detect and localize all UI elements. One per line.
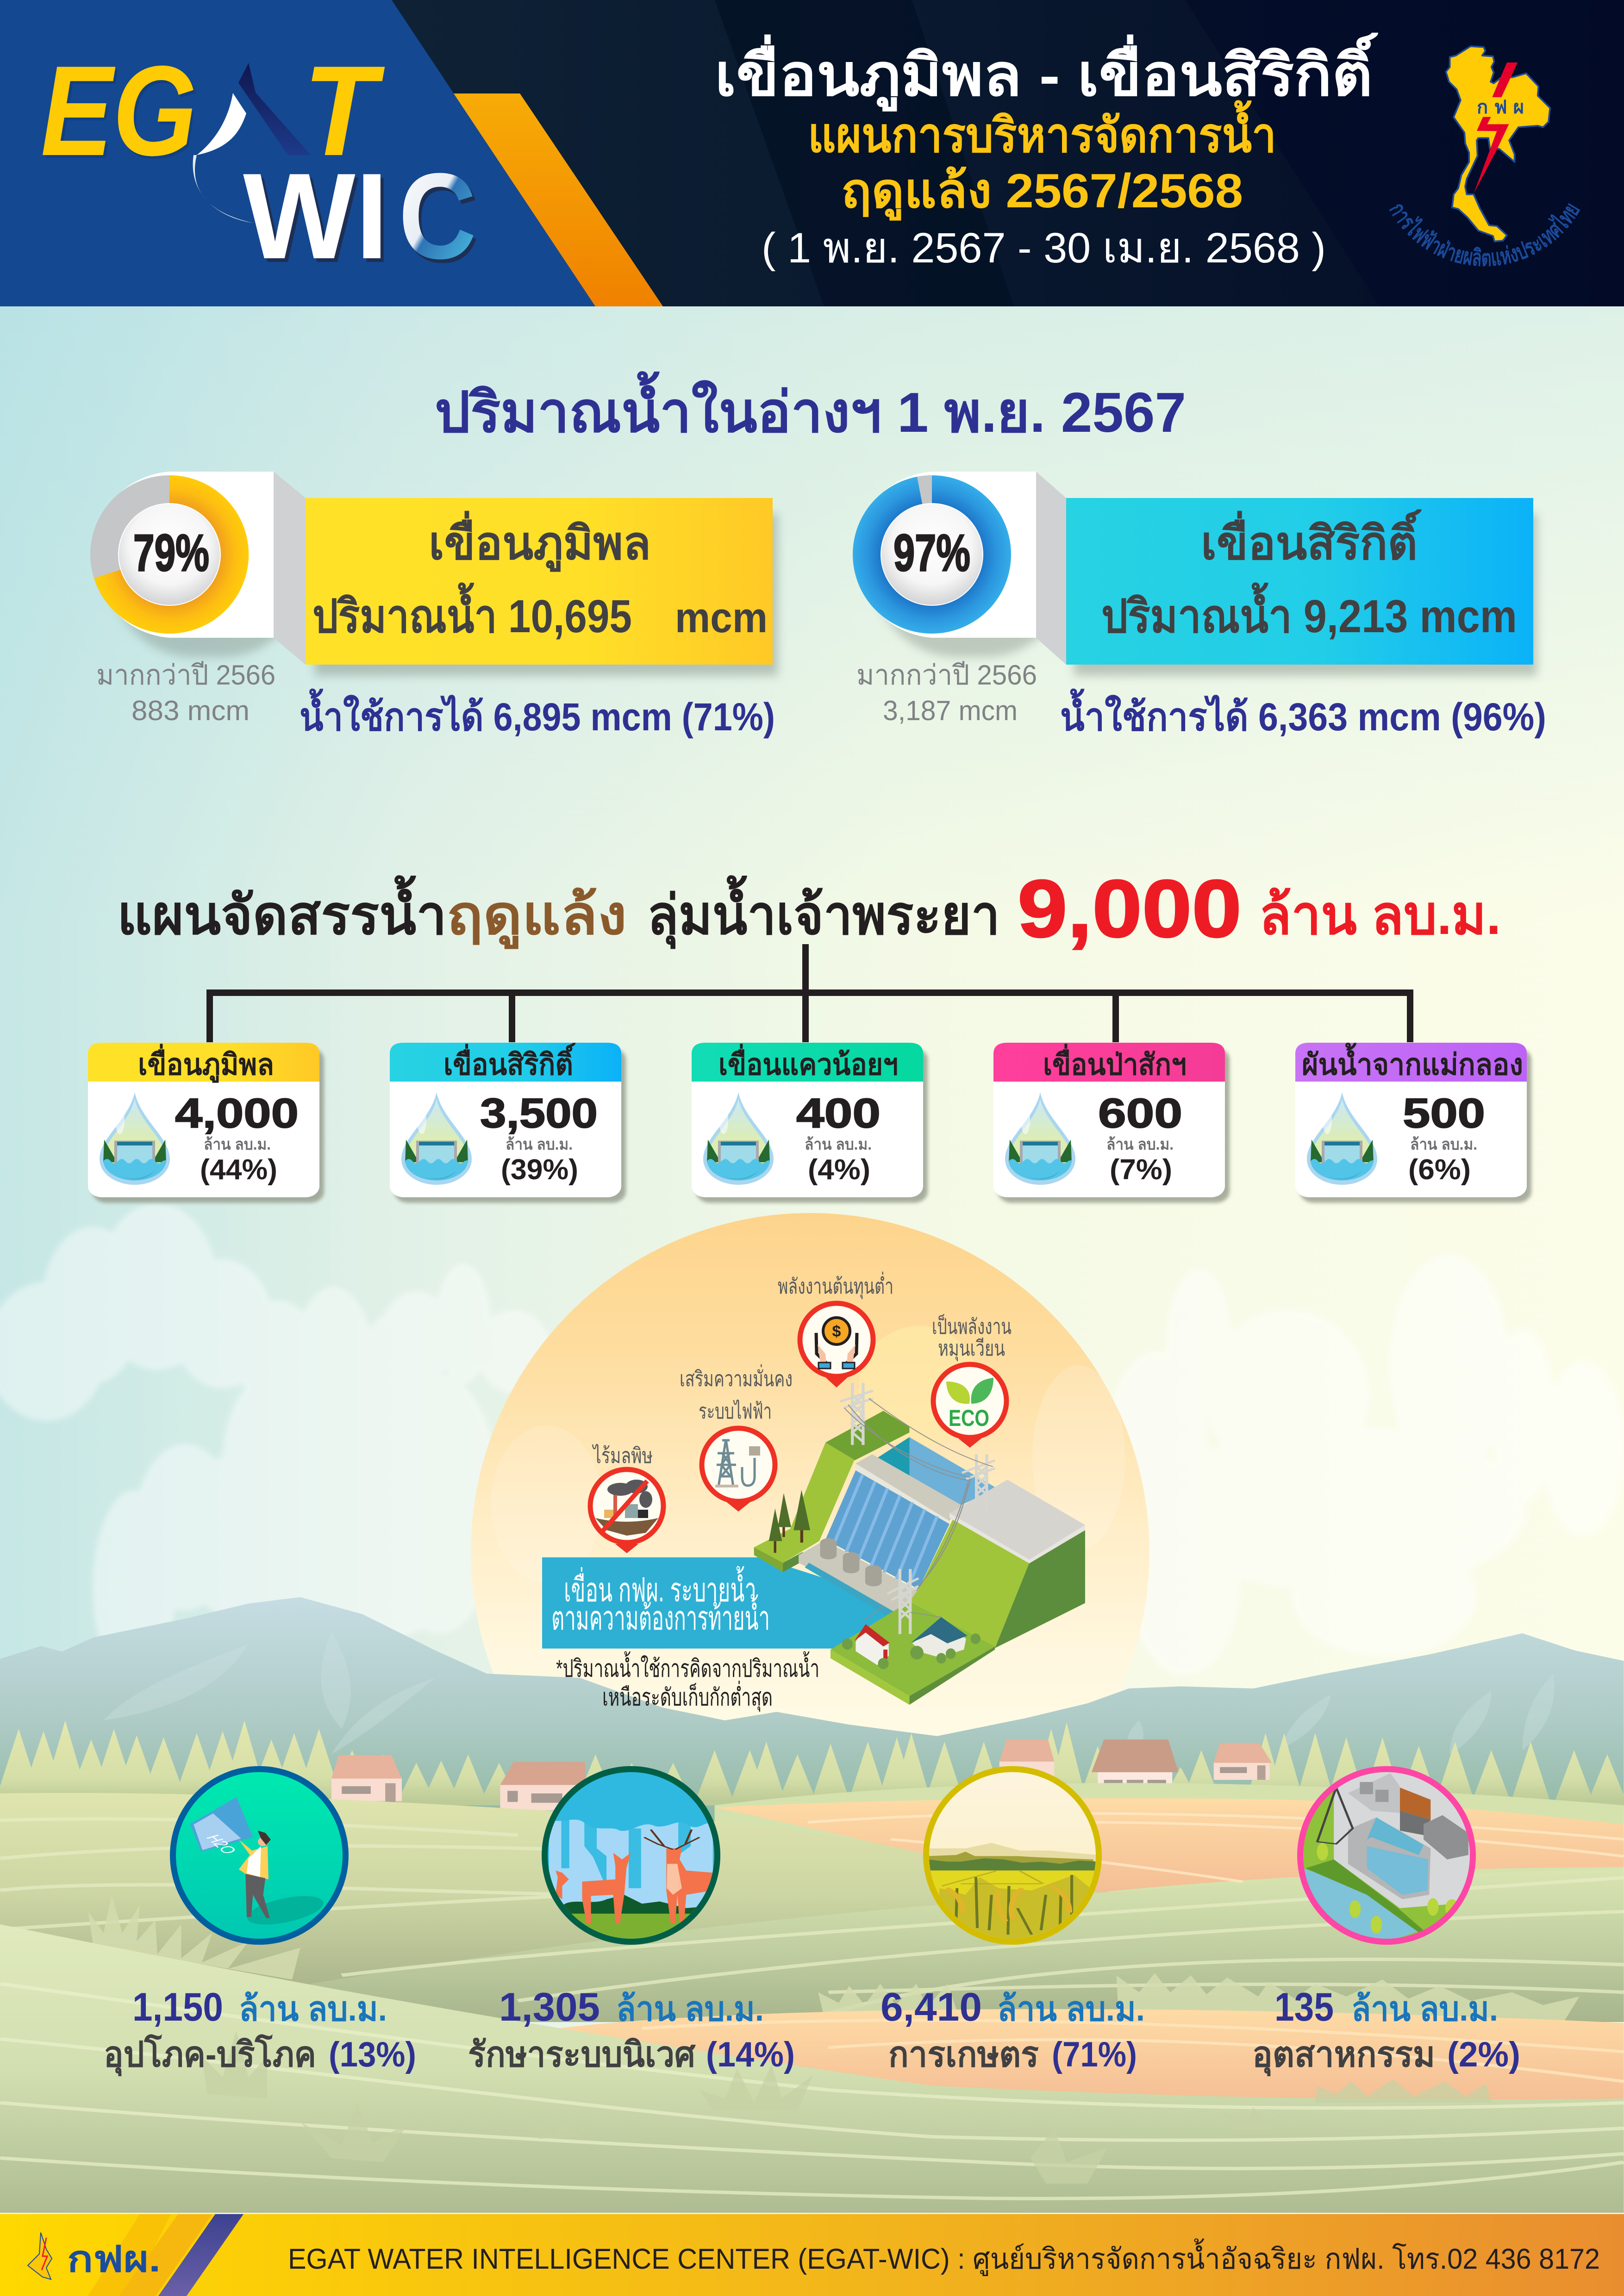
card: Mae Klong (1295, 1043, 1531, 1203)
tree line (0, 1720, 1624, 1805)
card title: เขื่อนแควน้อยฯ (718, 1044, 898, 1081)
allocation heading: ฤดูแล้ง (447, 885, 627, 949)
usable water: น้ำใช้การได้ 6,895 mcm (71%) (300, 688, 775, 739)
card title: เขื่อนภูมิพล (138, 1044, 274, 1083)
blue banner (542, 1557, 926, 1649)
background landscape (0, 1597, 1624, 2216)
cyan box (1066, 498, 1533, 665)
usable water: น้ำใช้การได้ 6,363 mcm (96%) (1060, 688, 1546, 739)
icon: eco leaves (933, 1364, 1006, 1448)
card: Kwae Noi (692, 1043, 928, 1203)
footnote: *ปริมาณน้ำใช้การคิดจากปริมาณน้ำ (556, 1651, 819, 1682)
donut 79%: 79% (133, 524, 209, 582)
dam illustration (754, 1383, 1085, 1705)
allocation heading: แผนจัดสรรน้ำ (117, 875, 447, 946)
left field (0, 1793, 1139, 1992)
EGAT emblem: map of Thailand: ก ฟ ผ (1477, 97, 1524, 118)
logo: EGAT WIC: T (303, 39, 386, 182)
stat: industry: อุตสาหกรรม (1252, 2035, 1435, 2077)
icon: low-cost coin and hands: $ (832, 1323, 841, 1340)
donut 97% (853, 472, 1066, 665)
crest (856, 1454, 962, 1521)
share: (4%) (808, 1154, 870, 1186)
stat: consumption: (13%) (329, 2035, 416, 2074)
clouds: right (1106, 1254, 1624, 1675)
volume: mcm (675, 594, 768, 641)
amount: 600 (1098, 1090, 1182, 1137)
footnote (556, 1651, 819, 1712)
dam name: เขื่อนสิริกิติ์ (1201, 509, 1422, 569)
footer logo (28, 2233, 161, 2279)
blue banner: ตามความต้องการท้ายน้ำ (551, 1594, 770, 1637)
unit: ล้าน ลบ.ม. (506, 1136, 573, 1153)
icon: low-cost coin and hands (800, 1303, 873, 1388)
unit: ล้าน ลบ.ม. (1410, 1136, 1477, 1153)
compared with 2566 (856, 660, 1037, 726)
logo: EGAT WIC: WI (243, 148, 388, 284)
lower peach field (559, 2009, 1624, 2103)
drop icon (401, 1092, 472, 1185)
top peach field (715, 1798, 1624, 1892)
labels: benefits: หมุนเวียน (938, 1336, 1005, 1362)
share: (44%) (200, 1154, 277, 1186)
donut 79% (90, 472, 306, 665)
icon: eco leaves: ECO (949, 1405, 989, 1431)
compared with 2566: มากกว่าปี 2566 (856, 660, 1037, 691)
deer (582, 1853, 631, 1923)
use: consumption circle (170, 1766, 349, 1945)
use: agriculture circle (923, 1766, 1102, 1945)
compared with 2566: 883 mcm (131, 695, 250, 726)
card title: เขื่อนป่าสักฯ (1043, 1044, 1187, 1081)
section heading: reservoir volume: ปริมาณน้ำในอ่างฯ 1 พ.ย. 2567 (435, 371, 1186, 444)
icon: no pollution (590, 1469, 663, 1553)
logo: EGAT WIC: C (399, 148, 476, 284)
far right green field (715, 1783, 1624, 1933)
icon: power tower and plug (702, 1428, 775, 1512)
unit: ล้าน ลบ.ม. (204, 1136, 271, 1153)
volume: ปริมาณน้ำ 10,695 (312, 582, 632, 642)
title: เขื่อนภูมิพล - เขื่อนสิริกิติ์ (715, 32, 1379, 112)
allocation heading: 9,000 (1018, 864, 1242, 954)
stat: industry: 135 (1274, 1985, 1334, 2029)
unit: ล้าน ลบ.ม. (1106, 1136, 1174, 1153)
EGAT emblem: map of Thailand (1384, 46, 1585, 271)
stat: agriculture: 6,410 (881, 1985, 982, 2029)
blue banner: เขื่อน กฟผ. ระบายน้ำ (564, 1566, 756, 1609)
stat: industry: (2%) (1447, 2035, 1520, 2074)
allocation heading (117, 864, 1501, 954)
drop icon (703, 1092, 774, 1185)
stat: consumption: ล้าน ลบ.ม. (239, 1990, 387, 2028)
logo: EGAT WIC: EG (41, 39, 197, 182)
mid green field (311, 1868, 1624, 2022)
amount: 4,000 (175, 1090, 299, 1137)
stat: ecosystem: รักษาระบบนิเวศ (468, 2035, 696, 2074)
yellow box (306, 498, 773, 665)
use: consumption circle: H2O (201, 1833, 240, 1856)
stat: ecosystem: (14%) (706, 2035, 795, 2074)
compared with 2566: มากกว่าปี 2566 (96, 660, 275, 691)
share: (6%) (1408, 1154, 1471, 1186)
volume: ปริมาณน้ำ 9,213 mcm (1101, 582, 1517, 642)
unit: ล้าน ลบ.ม. (805, 1136, 872, 1153)
logo: EGAT WIC: WI (246, 151, 392, 288)
card title: ผันน้ำจากแม่กลอง (1302, 1043, 1523, 1081)
grass tufts back (88, 1895, 1579, 2022)
dam name: เขื่อนภูมิพล (429, 510, 651, 572)
stat: agriculture: ล้าน ลบ.ม. (997, 1990, 1145, 2028)
stat: consumption: อุปโภค-บริโภค (104, 2034, 316, 2077)
card: Sirikit (390, 1043, 626, 1203)
use: ecosystem circle (542, 1766, 722, 1945)
amount: 3,500 (480, 1090, 598, 1137)
drop icon (1307, 1092, 1377, 1185)
card: Bhumibol (88, 1043, 324, 1203)
spillway (825, 1470, 949, 1589)
header band (0, 0, 1624, 306)
stat: industry: ล้าน ลบ.ม. (1351, 1990, 1498, 2028)
stat: ecosystem: ล้าน ลบ.ม. (616, 1990, 764, 2028)
amount: 500 (1403, 1090, 1485, 1137)
compared with 2566 (96, 660, 275, 726)
right hill (909, 1518, 1029, 1648)
drop icon (100, 1092, 170, 1185)
compared with 2566: 3,187 mcm (883, 695, 1018, 726)
mountains (0, 1597, 1624, 1823)
labels: benefits: ระบบไฟฟ้า (699, 1399, 772, 1423)
footer logo: กฟผ. (67, 2239, 161, 2279)
sun circle (471, 1213, 1149, 1892)
stat: agriculture: (71%) (1052, 2035, 1137, 2074)
front green field (0, 1924, 1624, 2216)
use: industry circle (1297, 1766, 1485, 1945)
allocation heading: ลุ่มน้ำเจ้าพระยา (647, 875, 1000, 949)
allocation heading: ล้าน ลบ.ม. (1259, 885, 1501, 946)
logo: EGAT WIC: C (401, 151, 479, 288)
footer band (0, 2213, 1624, 2296)
grass tufts front (202, 2030, 1491, 2184)
footnote: เหนือระดับเก็บกักต่ำสุด (602, 1680, 773, 1712)
stat: agriculture: การเกษตร (888, 2035, 1039, 2074)
card: Pa Sak (993, 1043, 1230, 1203)
logo: EGAT WIC (41, 39, 479, 288)
houses (855, 1617, 967, 1665)
trees (769, 1490, 810, 1553)
subtitle line 1: แผนการบริหารจัดการน้ำ (808, 100, 1276, 162)
footer text: EGAT WATER INTELLIGENCE CENTER (EGAT-WIC) : ศูนย์บริหารจัดการน้ำอัจฉริยะ กฟผ. โทร.02 436 8172 (288, 2238, 1600, 2276)
houses (331, 1740, 1272, 1811)
stat: ecosystem (468, 1985, 795, 2074)
date range: ( 1 พ.ย. 2567 - 30 เม.ย. 2568 ) (762, 224, 1326, 272)
stat: industry (1252, 1985, 1520, 2077)
stat: agriculture (881, 1985, 1145, 2074)
labels: benefits: ไร้มลพิษ (592, 1444, 653, 1468)
volume (312, 582, 768, 642)
donut 97%: 97% (893, 524, 970, 582)
blue panel (0, 0, 595, 306)
orange stripe (454, 93, 663, 306)
labels: benefits: เป็นพลังงาน (932, 1314, 1012, 1338)
card title: เขื่อนสิริกิติ์ (443, 1043, 576, 1081)
tree connector lines (210, 944, 1410, 1042)
share: (39%) (501, 1154, 578, 1186)
reservoir (877, 1437, 997, 1506)
share: (7%) (1110, 1154, 1172, 1186)
labels: benefits: เสริมความมั่นคง (680, 1364, 793, 1391)
clouds: left (0, 1203, 551, 1685)
bottom platform (831, 1601, 995, 1696)
labels: benefits: พลังงานต้นทุนต่ำ (778, 1271, 893, 1300)
stat: consumption: 1,150 (132, 1985, 223, 2029)
left hill (825, 1411, 909, 1461)
panel: Sirikit volume (853, 472, 1537, 676)
labels: benefits (592, 1271, 1012, 1468)
transmission towers (840, 1383, 995, 1634)
stat: ecosystem: 1,305 (499, 1985, 600, 2029)
small trees (842, 1633, 981, 1669)
EGAT emblem: map of Thailand: การไฟฟ้าฝ่ายผลิตแห่งประเทศไทย (1384, 198, 1585, 271)
stat: consumption (104, 1985, 416, 2077)
panel: Bhumibol volume (90, 472, 778, 676)
base and cylinders (799, 1540, 918, 1616)
logo: EGAT WIC: EG (44, 42, 199, 185)
drop icon (1005, 1092, 1075, 1185)
subtitle line 2: ฤดูแล้ง 2567/2568 (841, 164, 1243, 221)
amount: 400 (796, 1090, 881, 1137)
